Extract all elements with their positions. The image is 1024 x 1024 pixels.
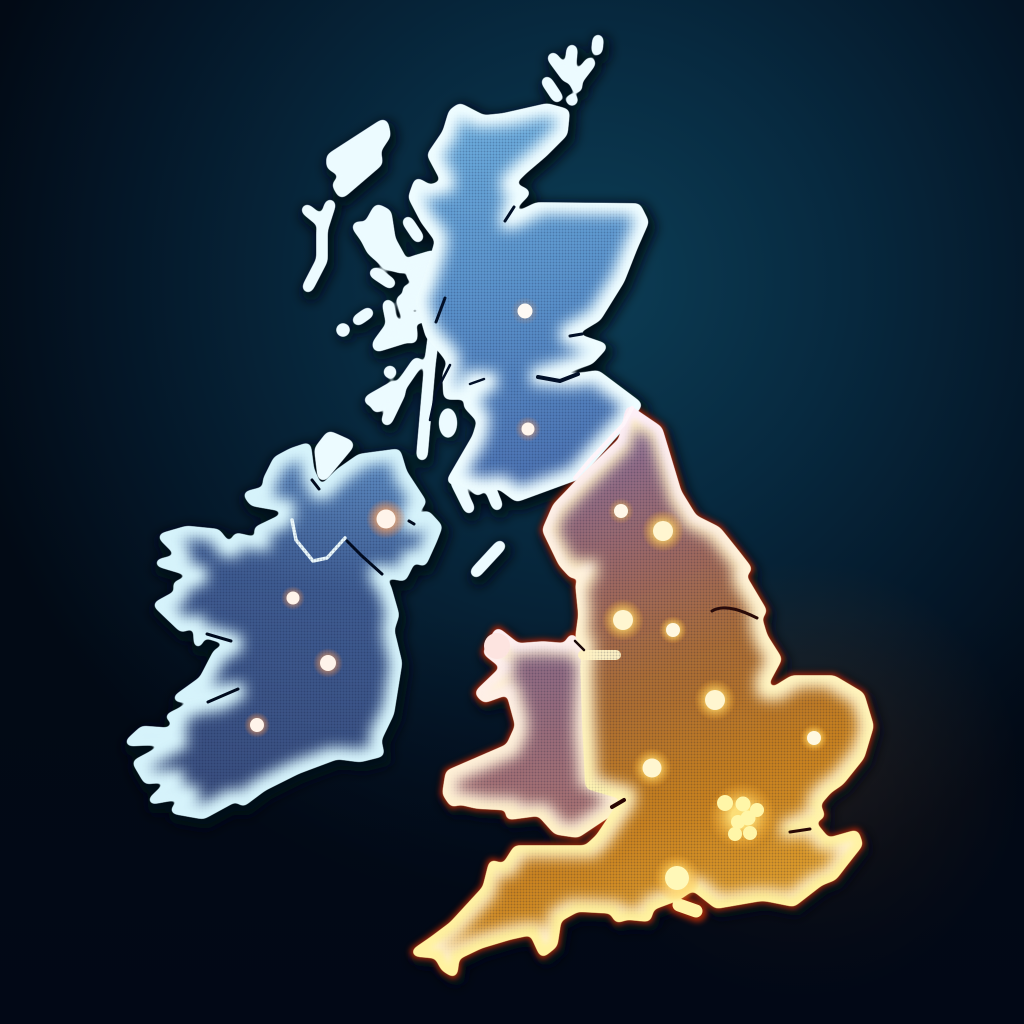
warm glow around England and Wales (417, 411, 869, 972)
Northern Ireland border (292, 520, 345, 561)
drop shadow under landmasses (133, 45, 872, 977)
Anglesey (484, 633, 510, 659)
halftone texture (154, 114, 863, 950)
region: Wales (447, 633, 623, 833)
region: Scottish islands (307, 40, 598, 572)
Wirral spit (583, 650, 616, 660)
region: Scotland (413, 108, 644, 497)
Scottish border line (575, 408, 632, 478)
sea lochs (430, 207, 582, 420)
Isle of Wight (679, 905, 696, 911)
region: Ireland (130, 447, 438, 815)
estuaries (575, 608, 810, 832)
city dots: Scotland and Ireland (244, 297, 541, 738)
inlets (207, 480, 414, 702)
region: England (417, 408, 869, 972)
London glow cluster (708, 782, 776, 850)
city dots: England (602, 498, 828, 902)
